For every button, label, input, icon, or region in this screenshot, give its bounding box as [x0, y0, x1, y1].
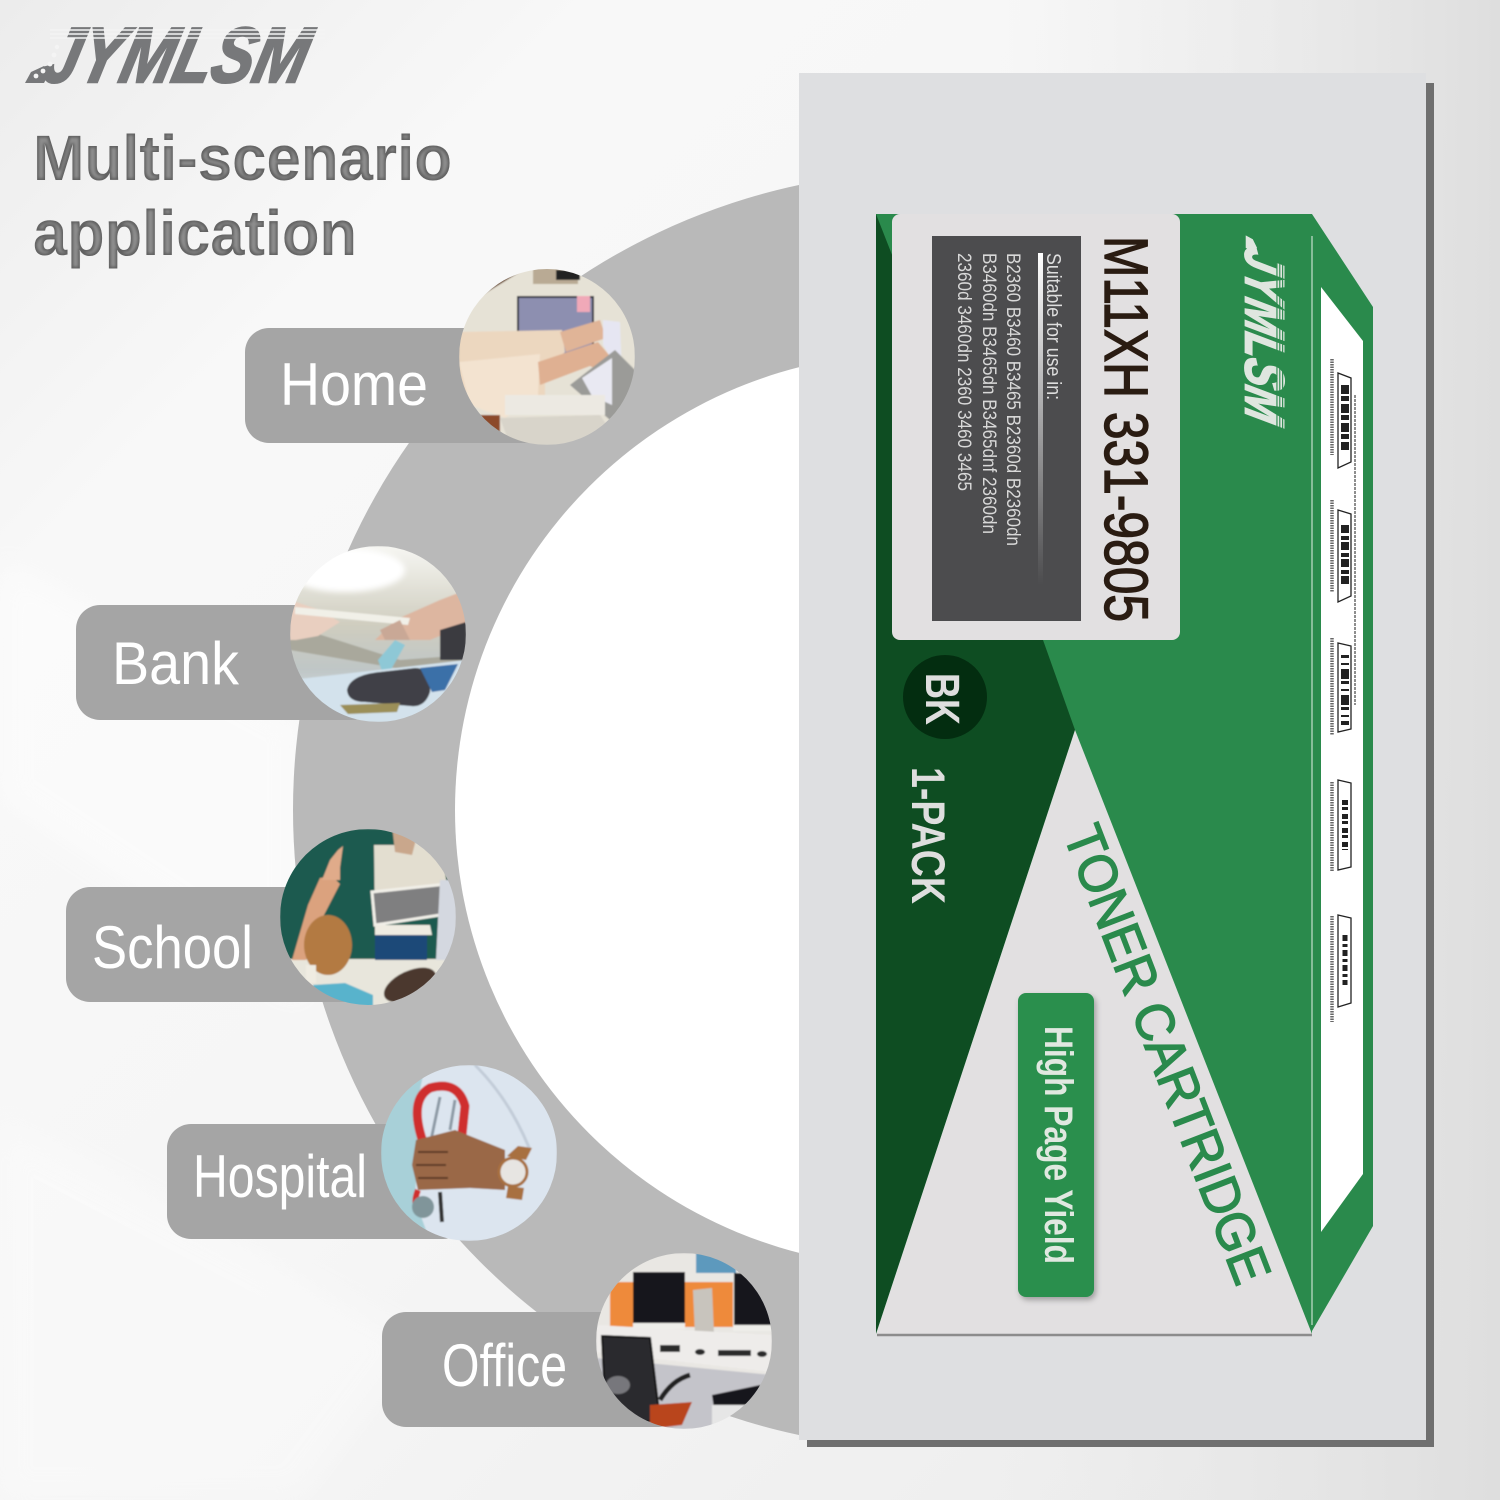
Office label pill: Office	[442, 1332, 567, 1399]
high page yield badge: High Page Yield	[1036, 1026, 1080, 1264]
grey ring arc	[293, 185, 799, 1435]
box edges	[1311, 236, 1313, 1325]
School label pill	[66, 887, 366, 1002]
compatibility panel: B2360 B3460 B3465 B2360d B2360dn	[1002, 253, 1023, 546]
logo: JYMLSM	[36, 11, 321, 99]
Home label pill	[245, 328, 575, 443]
compatibility panel	[932, 236, 1081, 621]
School photo	[280, 825, 456, 1010]
Hospital label pill	[167, 1124, 467, 1239]
title: application	[33, 197, 357, 269]
Bank label pill: Bank	[112, 630, 240, 697]
side white instruction label	[1321, 287, 1363, 1232]
Home label pill: Home	[280, 351, 428, 418]
light triangle facet	[876, 730, 1312, 1334]
Hospital label pill: Hospital	[193, 1143, 367, 1210]
toner box	[876, 214, 1373, 1335]
title	[33, 122, 452, 269]
product card with shadow	[799, 73, 1434, 1447]
School label pill: School	[92, 914, 253, 981]
scenario: School	[66, 825, 456, 1010]
scenario: Home	[245, 268, 635, 445]
toner cartridge text: TONER CARTRIDGE	[1052, 817, 1282, 1292]
Home photo	[459, 268, 635, 445]
scenario: Bank	[76, 546, 466, 722]
box logo: JYMLSM	[1233, 242, 1295, 431]
Office label pill	[382, 1312, 682, 1427]
Office photo	[596, 1253, 776, 1429]
colour badge BK	[903, 655, 987, 739]
colour badge BK: BK	[915, 673, 968, 725]
box side panel	[1312, 214, 1373, 1331]
Hospital photo	[381, 1065, 557, 1241]
Bank photo	[285, 546, 466, 722]
compatibility panel: Suitable for use in:	[1042, 253, 1064, 400]
model label panel	[892, 214, 1180, 640]
dark green facet	[876, 214, 1075, 1334]
scenario: Office	[382, 1253, 776, 1429]
1-PACK text: 1-PACK	[902, 767, 955, 904]
compatibility panel: 2360d 3460dn 2360 3460 3465	[953, 253, 974, 491]
Bank label pill	[76, 605, 376, 720]
scenario: Hospital	[167, 1065, 557, 1241]
title: Multi-scenario	[33, 122, 452, 194]
high page yield badge	[1018, 993, 1094, 1297]
compatibility panel: B3460dn B3465dn B3465dnf 2360dn	[978, 253, 999, 534]
model number: M11XH 331-9805	[1092, 236, 1160, 622]
box front base green	[876, 214, 1312, 1334]
